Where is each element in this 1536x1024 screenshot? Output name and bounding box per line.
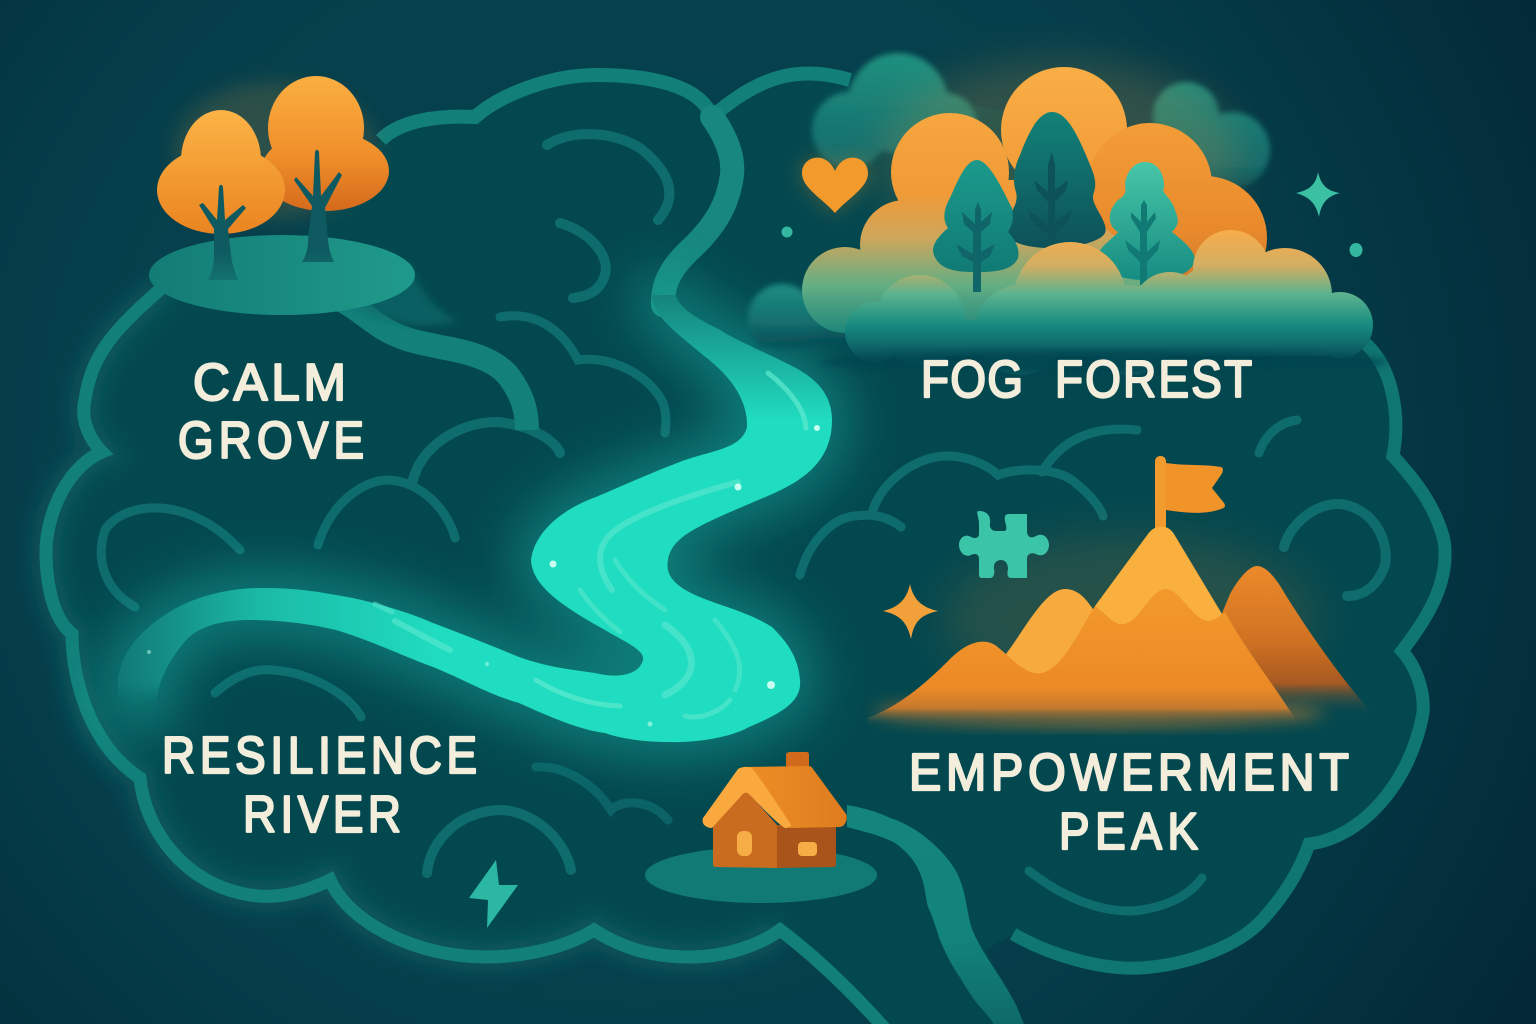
mountain glow xyxy=(945,535,1315,705)
back orange clouds xyxy=(802,67,1155,340)
label: resilience river: RIVER xyxy=(243,786,401,844)
dim background clouds xyxy=(812,53,1270,188)
cozy house scene xyxy=(645,752,877,903)
label: calm grove xyxy=(178,353,364,470)
front clouds xyxy=(845,230,1373,375)
label: calm grove: CALM xyxy=(193,353,346,411)
label: fog forest: FOG xyxy=(921,351,1023,409)
label: calm grove: GROVE xyxy=(178,412,364,470)
low left cloud xyxy=(748,284,866,352)
front mountain xyxy=(868,589,1300,726)
label: resilience river: RESILIENCE xyxy=(162,727,477,785)
house island xyxy=(645,847,877,903)
island xyxy=(149,235,415,315)
label: empowerment peak: PEAK xyxy=(1059,803,1198,861)
resilience river xyxy=(118,295,832,742)
label: fog forest: FOREST xyxy=(1055,351,1252,409)
middle tree xyxy=(1004,112,1106,250)
windows xyxy=(737,831,752,856)
river sparkle dots xyxy=(147,425,820,726)
icon: orange sparkle xyxy=(883,584,938,639)
fog forest scene xyxy=(748,53,1390,375)
label: empowerment peak: EMPOWERMENT xyxy=(909,743,1349,801)
branch stream from calm grove xyxy=(300,291,527,430)
label: empowerment peak xyxy=(909,743,1349,861)
flag xyxy=(1155,456,1225,532)
icon: lightning bolt xyxy=(469,860,518,928)
icon: heart xyxy=(802,158,868,213)
inner brain fold lines xyxy=(101,134,1386,911)
left back mountain xyxy=(1006,589,1095,684)
back clouds right side xyxy=(1088,123,1267,300)
calm grove scene xyxy=(149,76,458,326)
island shadow xyxy=(340,262,458,326)
tree: right xyxy=(261,76,389,262)
orange glow xyxy=(880,60,1240,260)
mountain base glow xyxy=(875,698,1325,726)
right mountain xyxy=(1205,566,1375,724)
river highlights xyxy=(375,373,806,717)
right tree xyxy=(1097,162,1195,285)
empowerment peak scene xyxy=(868,456,1375,726)
roof right slope xyxy=(743,766,847,828)
cloud base shade xyxy=(820,351,1390,373)
left tree xyxy=(933,160,1019,292)
label: fog forest xyxy=(921,351,1252,409)
mountains xyxy=(868,526,1375,726)
summit xyxy=(1095,526,1225,654)
walls xyxy=(713,790,777,868)
thin stream feeding the river xyxy=(663,117,732,305)
label: resilience river xyxy=(162,727,477,844)
glow behind trees xyxy=(175,82,375,218)
icon: teal dots xyxy=(782,226,1362,257)
stream below the house xyxy=(847,805,1028,1024)
tree: left xyxy=(157,110,285,280)
chimney xyxy=(786,752,809,770)
icon: teal sparkle xyxy=(1296,172,1340,217)
icon: puzzle piece xyxy=(959,511,1049,578)
roof left slope xyxy=(703,767,791,828)
